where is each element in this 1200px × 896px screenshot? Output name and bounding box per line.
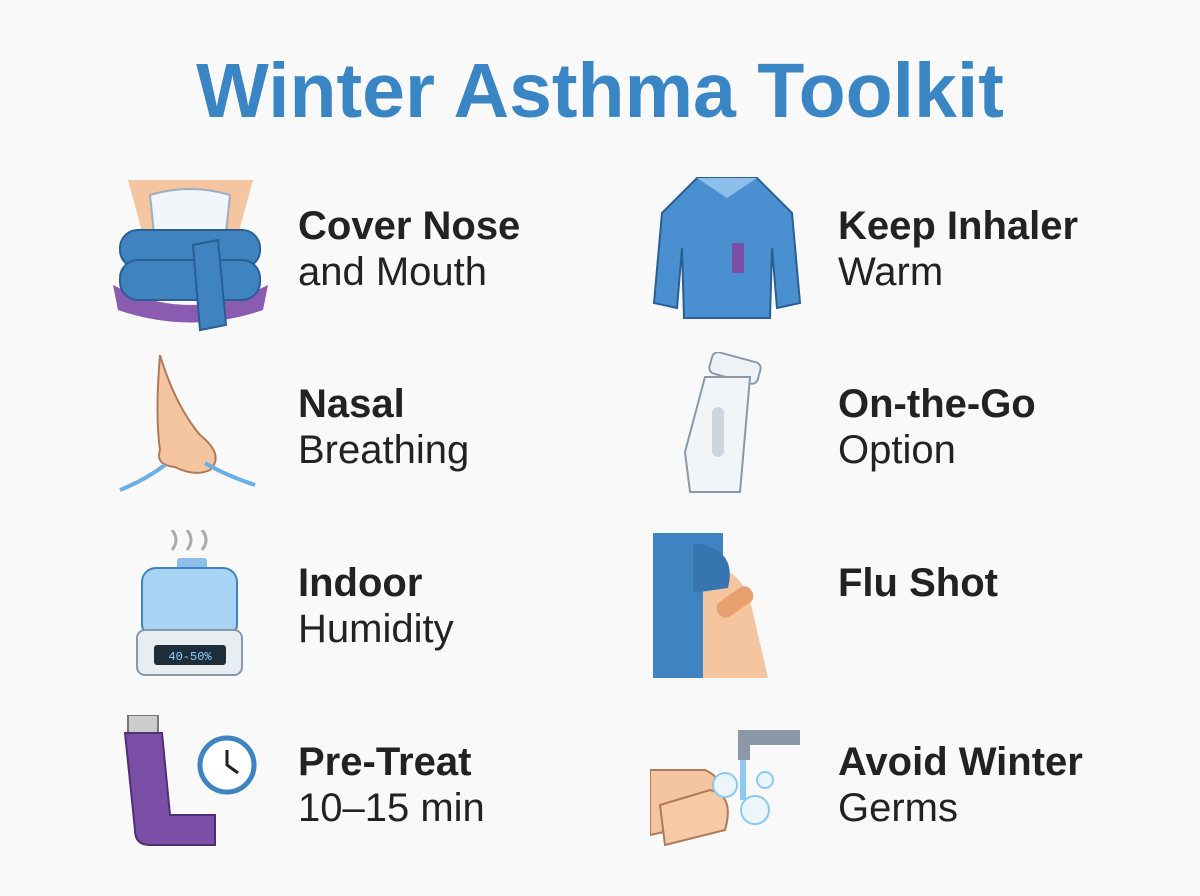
text: cover nose: Cover Nose xyxy=(298,204,520,248)
text: indoor humidity: Indoor xyxy=(298,561,422,605)
icon: scarf and mask xyxy=(113,180,268,332)
icon: inhaler with clock xyxy=(124,715,256,846)
text: on-the-go: On-the-Go xyxy=(838,382,1036,426)
icon: jacket xyxy=(652,177,802,319)
text: indoor humidity: Humidity xyxy=(298,607,454,651)
text: pre-treat: Pre-Treat xyxy=(298,740,471,784)
text: cover nose xyxy=(298,204,520,294)
text: cover nose: and Mouth xyxy=(298,250,487,294)
text: nasal breathing xyxy=(298,382,469,472)
text: on-the-go xyxy=(838,382,1036,472)
icon: handwashing xyxy=(650,730,800,846)
text: indoor humidity xyxy=(298,561,454,651)
text: avoid winter germs: Germs xyxy=(838,786,958,830)
text: nasal breathing: Breathing xyxy=(298,428,469,472)
icon: humidifier: 40-50% xyxy=(168,650,212,664)
icon: arm bandage xyxy=(653,533,768,678)
icon: nebulizer xyxy=(684,352,762,493)
title: Winter Asthma Toolkit xyxy=(196,48,1004,134)
text: keep inhaler warm xyxy=(838,204,1078,294)
text: nasal breathing: Nasal xyxy=(298,382,405,426)
text: avoid winter germs: Avoid Winter xyxy=(838,740,1083,784)
text: pre-treat xyxy=(298,740,485,830)
text: keep inhaler warm: Warm xyxy=(838,250,943,294)
text: avoid winter germs xyxy=(838,740,1083,830)
icon: nose xyxy=(119,355,256,492)
text: keep inhaler warm: Keep Inhaler xyxy=(838,204,1078,248)
text: flu shot: Flu Shot xyxy=(838,561,998,605)
text: on-the-go: Option xyxy=(838,428,956,472)
icon: humidifier xyxy=(136,530,243,676)
text: pre-treat: 10–15 min xyxy=(298,786,485,830)
